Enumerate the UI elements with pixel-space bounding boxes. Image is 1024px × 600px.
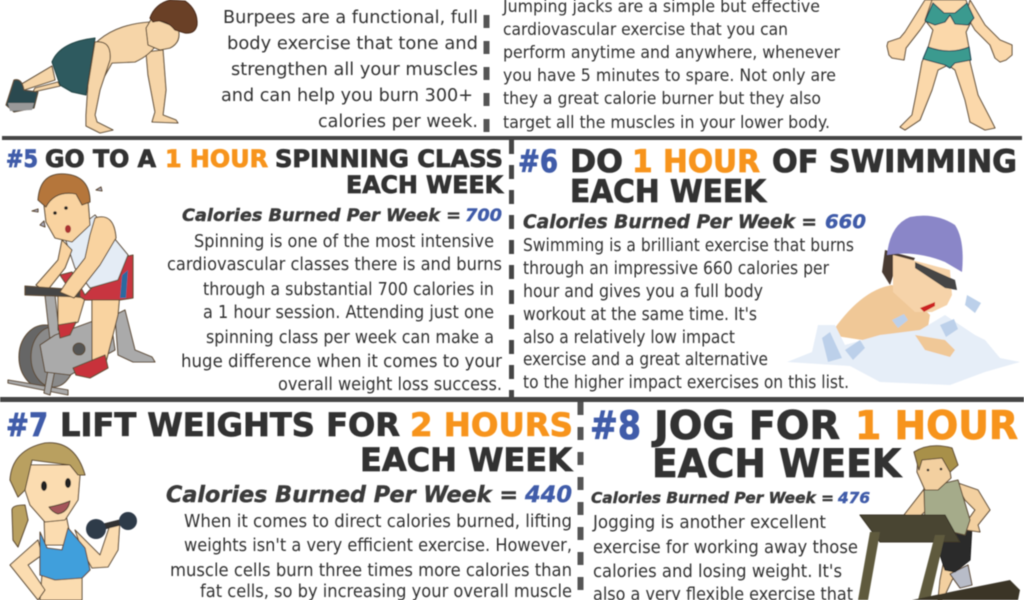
calories line: 660: Calories Burned Per Week = bbox=[523, 211, 817, 233]
body text: swimming: workout at the same time. It's bbox=[523, 305, 757, 325]
body text: jumping jacks: they a great calorie burner but they also bbox=[503, 89, 821, 108]
body text: jumping jacks: target all the muscles in your lower body. bbox=[503, 113, 830, 132]
body text: swimming: hour and gives you a full body bbox=[523, 282, 763, 302]
illustration: woman with dumbbell bbox=[10, 443, 137, 600]
calories line: 440: 440 bbox=[524, 483, 572, 508]
body text: spinning: spinning class per week can make a bbox=[206, 328, 494, 348]
body text: swimming: Swimming is a brilliant exercise that burns bbox=[523, 236, 854, 256]
heading: #5 spinning class: #5 bbox=[6, 145, 38, 173]
heading: #5 spinning class: 1 HOUR bbox=[165, 145, 268, 173]
panel: burpees bbox=[6, 0, 478, 133]
vertical dashed divider: top row bbox=[484, 15, 490, 135]
panel: swimming bbox=[518, 144, 1020, 393]
heading: #6 swimming: DO bbox=[570, 144, 623, 180]
body text: swimming bbox=[523, 236, 854, 393]
vertical dashed divider: bottom row bbox=[578, 402, 584, 600]
heading: #7 lift weights bbox=[6, 406, 573, 479]
heading: #5 spinning class bbox=[6, 145, 504, 199]
body text: burpees: body exercise that tone and bbox=[227, 33, 478, 54]
illustration: swimmer bbox=[787, 216, 1020, 385]
body text: jumping jacks: you have 5 minutes to spare. Not only are bbox=[503, 66, 836, 85]
heading: #6 swimming: OF SWIMMING bbox=[772, 144, 1017, 180]
body text: swimming: exercise and a great alternative bbox=[523, 350, 768, 370]
heading: #6 swimming: #6 bbox=[518, 144, 558, 180]
heading: #7 lift weights: #7 bbox=[6, 406, 48, 444]
calories line: 476: 476 bbox=[837, 489, 870, 507]
body text: burpees: strengthen all your muscles bbox=[231, 59, 478, 80]
body text: spinning: a 1 hour session. Attending just one bbox=[203, 303, 494, 323]
illustration: man doing burpee bbox=[6, 0, 197, 133]
calories line: 440: Calories Burned Per Week = bbox=[166, 483, 518, 508]
body text: jogging: exercise for working away those bbox=[593, 537, 858, 558]
body text: spinning bbox=[167, 232, 503, 395]
heading: #5 spinning class: SPINNING CLASS bbox=[275, 145, 503, 173]
calories line: 700: 700 bbox=[465, 206, 502, 226]
body text: spinning: cardiovascular classes there is and burns bbox=[167, 255, 502, 275]
body text: burpees: calories per week. bbox=[318, 111, 478, 132]
body text: swimming: through an impressive 660 calories per bbox=[523, 259, 830, 279]
body text: spinning: through a substantial 700 calories in bbox=[203, 280, 494, 300]
body text: jogging bbox=[592, 512, 858, 600]
heading: #6 swimming bbox=[518, 144, 1017, 210]
illustration: man on treadmill bbox=[858, 446, 1020, 600]
body text: jogging: calories and losing weight. It's bbox=[593, 561, 842, 582]
vertical dashed divider: middle row bbox=[509, 140, 514, 397]
body text: weights: weights isn't a very efficient exercise. However, bbox=[184, 536, 572, 556]
heading: #8 jogging bbox=[590, 404, 1018, 487]
body text: spinning: overall weight loss success. bbox=[278, 375, 502, 395]
calories line: 700: Calories Burned Per Week = bbox=[182, 206, 461, 226]
illustration: woman doing jumping jacks bbox=[887, 0, 1012, 130]
body text: jumping jacks: cardiovascular exercise that you can bbox=[503, 20, 788, 39]
body text: weights bbox=[170, 512, 572, 600]
body text: burpees: Burpees are a functional, full bbox=[223, 7, 478, 28]
heading: #5 spinning class: GO TO A bbox=[45, 145, 156, 173]
heading: #5 spinning class: EACH WEEK bbox=[346, 171, 504, 199]
heading: #7 lift weights: 2 HOURS bbox=[410, 406, 573, 444]
illustration: man on spin bike bbox=[8, 174, 155, 395]
heading: #7 lift weights: EACH WEEK bbox=[360, 441, 573, 479]
panel: jumping jacks bbox=[502, 0, 1012, 132]
body text: swimming: also a relatively low impact bbox=[523, 328, 735, 348]
horizontal divider: upper bbox=[2, 136, 1022, 140]
body text: spinning: huge difference when it comes to your bbox=[181, 352, 503, 372]
heading: #8 jogging: #8 bbox=[590, 404, 641, 449]
heading: #7 lift weights: LIFT WEIGHTS FOR bbox=[60, 406, 400, 444]
body text: weights: muscle cells burn three times more calories than bbox=[170, 561, 572, 581]
heading: #6 swimming: 1 HOUR bbox=[632, 144, 760, 180]
panel: lift weights bbox=[6, 406, 573, 600]
body text: weights: When it comes to direct calories burned, lifting bbox=[184, 512, 572, 532]
panel: spinning class bbox=[6, 145, 504, 395]
body text: burpees bbox=[221, 7, 478, 132]
heading: #6 swimming: EACH WEEK bbox=[570, 174, 767, 210]
body text: spinning: Spinning is one of the most intensive bbox=[194, 232, 494, 252]
body text: swimming: to the higher impact exercises on this list. bbox=[523, 373, 849, 393]
calories line: 476: Calories Burned Per Week = bbox=[591, 489, 834, 507]
body text: jogging: Jogging is another excellent bbox=[592, 512, 826, 533]
heading: #8 jogging: EACH WEEK bbox=[652, 442, 903, 487]
heading: #8 jogging: 1 HOUR bbox=[855, 404, 1018, 449]
horizontal divider: lower bbox=[0, 397, 1024, 402]
body text: jumping jacks: perform anytime and anywhere, whenever bbox=[503, 43, 840, 62]
calories line: 660: 660 bbox=[825, 211, 866, 233]
panel: jogging bbox=[590, 404, 1020, 600]
heading: #8 jogging: JOG FOR bbox=[651, 404, 840, 449]
body text: jumping jacks bbox=[502, 0, 840, 132]
body text: burpees: and can help you burn 300+ bbox=[221, 85, 473, 106]
